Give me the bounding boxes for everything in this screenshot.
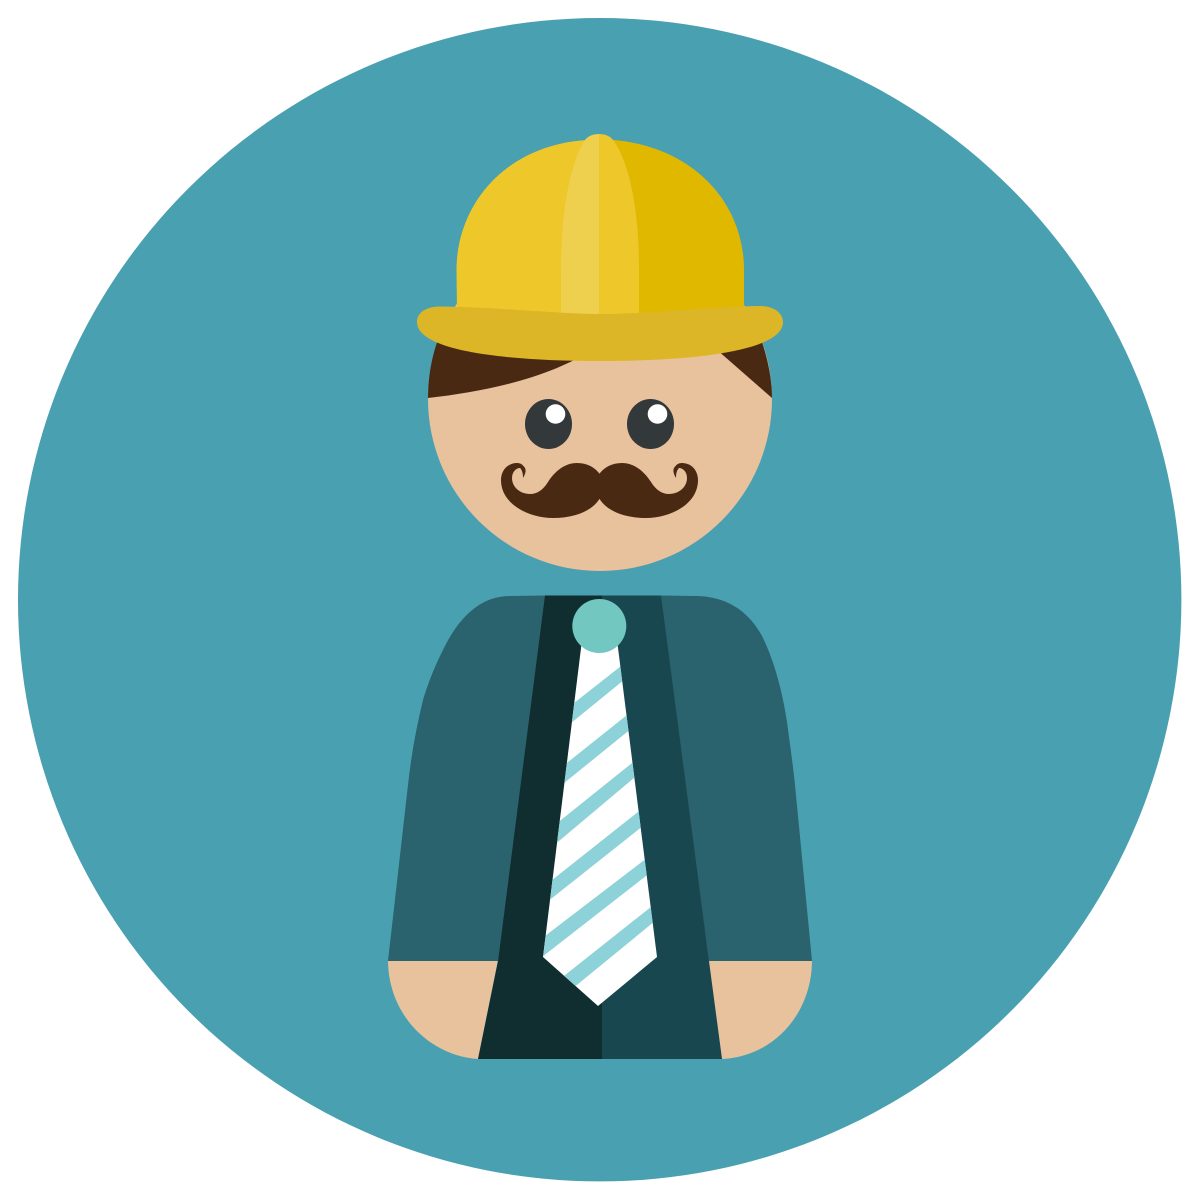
hard hat xyxy=(417,134,783,361)
moustache xyxy=(501,463,698,518)
right hand xyxy=(708,960,812,1059)
hat brim xyxy=(417,306,783,361)
tie stripes xyxy=(543,666,653,986)
tie base xyxy=(543,640,657,1006)
tie knot xyxy=(572,599,626,653)
necktie xyxy=(543,599,657,1006)
left eye xyxy=(525,399,572,449)
jacket left panel xyxy=(478,596,602,1059)
body: jacket and hands xyxy=(388,596,812,1059)
jacket right panel xyxy=(602,596,722,1059)
left sleeve xyxy=(388,596,546,961)
face xyxy=(428,227,772,571)
right eye xyxy=(627,399,674,449)
hat dome left xyxy=(456,134,600,316)
figure: engineer xyxy=(388,134,812,1059)
hair right xyxy=(716,335,772,398)
hair left xyxy=(428,340,578,398)
hat center ridge mid xyxy=(599,134,639,316)
head xyxy=(428,227,772,571)
left hand xyxy=(388,960,498,1059)
hat center ridge light xyxy=(561,134,599,316)
hat dome right xyxy=(599,134,744,316)
right sleeve xyxy=(660,596,812,961)
